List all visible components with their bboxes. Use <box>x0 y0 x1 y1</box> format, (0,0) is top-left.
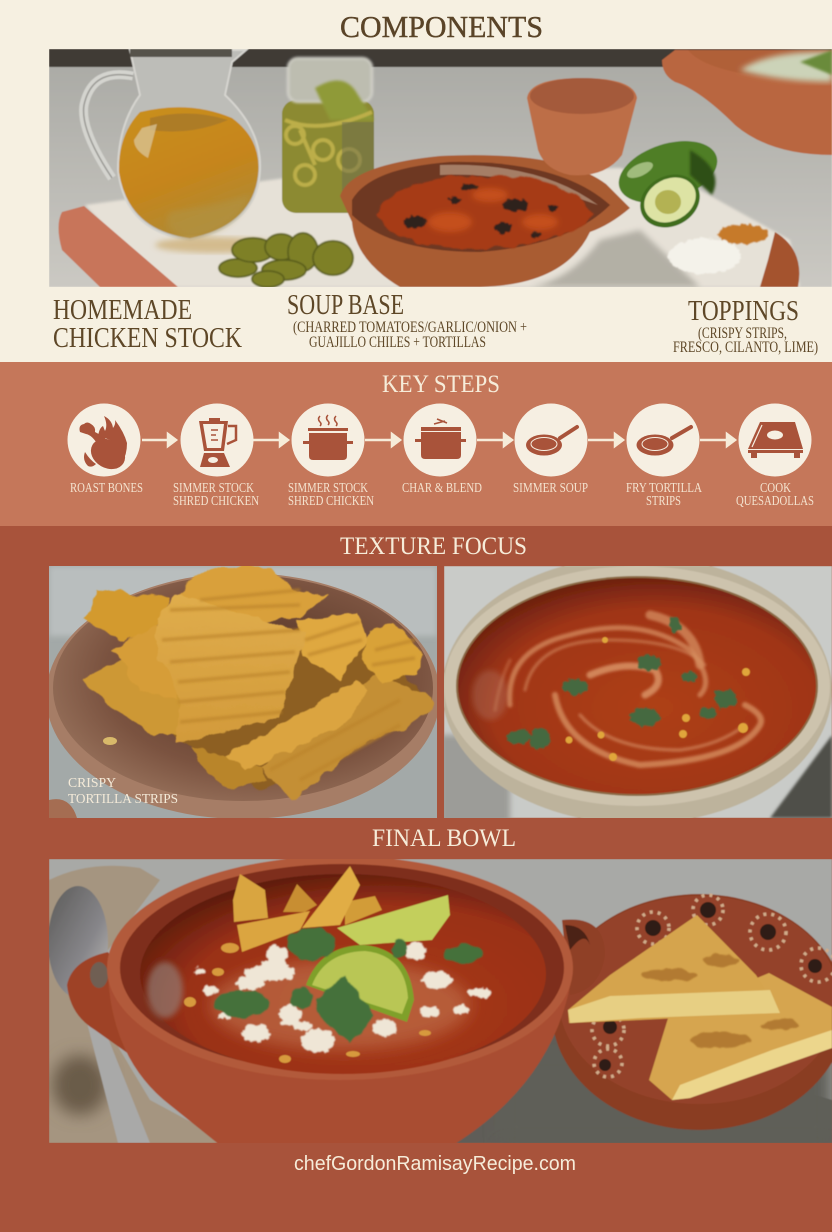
step 6: fry tortilla strips, pan: STRIPS <box>646 493 681 508</box>
label: soup base: SOUP BASE <box>287 290 404 321</box>
heading: key steps: KEY STEPS <box>382 371 500 398</box>
photo: components ingredients <box>49 49 832 287</box>
jalapeno slices <box>219 233 353 287</box>
background: cream components section <box>0 0 832 362</box>
back bowl <box>662 50 832 155</box>
arrow: step 2 to 3 <box>253 434 288 446</box>
arrow: step 6 to 7 <box>700 434 735 446</box>
soup <box>458 578 816 794</box>
label: soup base: (CHARRED TOMATOES/GARLIC/ONION + <box>293 319 527 336</box>
bowl right handle <box>562 919 596 954</box>
photo caption <box>68 778 178 803</box>
step label: ROAST BONES <box>70 480 143 495</box>
bowl left handle <box>66 952 128 1053</box>
cilantro leaves <box>214 928 482 1043</box>
plate <box>46 573 440 819</box>
arrow: step 1 to 2 <box>142 434 176 446</box>
bowl <box>442 556 832 824</box>
step label: CHAR & BLEND <box>402 480 482 495</box>
chips <box>80 567 433 802</box>
step 6: fry tortilla strips, pan <box>626 404 702 508</box>
arrow: step 3 to 4 <box>365 434 400 446</box>
spoon <box>48 886 108 998</box>
bowl body <box>109 986 569 1143</box>
lime slice <box>306 945 414 1022</box>
label: homemade chicken stock <box>53 295 242 354</box>
background: key steps band <box>0 362 832 526</box>
step 7: cook quesadillas, griddle: QUESADOLLAS <box>736 493 814 508</box>
right plate <box>552 894 832 1130</box>
step label: SIMMER STOCK <box>288 480 368 495</box>
step 1: roast bones <box>68 404 143 495</box>
chip ridges <box>162 590 415 780</box>
photo: silky soup bowl <box>440 556 832 825</box>
step label: COOK <box>760 480 791 495</box>
avocado half <box>640 174 700 228</box>
tortilla chips <box>233 866 382 952</box>
crumble base <box>210 960 470 1050</box>
cheese crumbles <box>194 942 492 1053</box>
label: toppings: TOPPINGS <box>688 296 799 327</box>
footer: website: chefGordonRamisayRecipe.com <box>294 1153 576 1175</box>
heading: texture focus: TEXTURE FOCUS <box>340 533 527 560</box>
step label: FRY TORTILLA <box>626 480 702 495</box>
step 7: cook quesadillas, griddle <box>736 404 814 508</box>
quesadilla wedges <box>649 973 832 1100</box>
step label: SIMMER SOUP <box>513 480 588 495</box>
step 5: simmer soup, pan <box>513 404 588 495</box>
napkin <box>49 866 230 1143</box>
step label: SIMMER STOCK <box>173 480 254 495</box>
arrow: step 5 to 6 <box>588 434 623 446</box>
step 2: simmer stock, blender: SHRED CHICKEN <box>173 493 259 508</box>
step 2: simmer stock, blender <box>173 404 259 508</box>
label: soup base <box>287 290 527 351</box>
photo caption: TORTILLA STRIPS <box>68 792 178 807</box>
avocado whole <box>618 140 718 203</box>
shadow and spices <box>530 230 700 287</box>
label: homemade chicken stock: CHICKEN STOCK <box>53 323 242 354</box>
cream swirl <box>495 615 761 765</box>
arrow: step 4 to 5 <box>477 434 512 446</box>
heading: final bowl: FINAL BOWL <box>372 825 516 852</box>
photo: final bowl and quesadillas <box>48 856 832 1150</box>
label: toppings <box>673 296 818 356</box>
step 3: simmer stock, steaming pot <box>288 404 374 508</box>
label: toppings: (CRISPY STRIPS, <box>698 325 787 342</box>
step 4: char and blend, pot <box>402 404 482 495</box>
photo caption: CRISPY <box>68 776 116 791</box>
jar <box>282 100 374 213</box>
photo: crispy tortilla strips <box>46 566 440 819</box>
label: homemade chicken stock: HOMEMADE <box>53 295 192 326</box>
lime wedge <box>337 895 450 945</box>
step 3: simmer stock, steaming pot: SHRED CHICKEN <box>288 493 374 508</box>
soup <box>140 874 546 1074</box>
label: soup base: GUAJILLO CHILES + TORTILLAS <box>309 334 486 351</box>
terracotta cup <box>527 78 637 175</box>
title: components: COMPONENTS <box>340 9 543 44</box>
bowl rim <box>107 856 573 1080</box>
background: lower terracotta section <box>0 526 832 1232</box>
cilantro and seeds <box>507 617 736 749</box>
salsa bowl <box>340 155 630 287</box>
